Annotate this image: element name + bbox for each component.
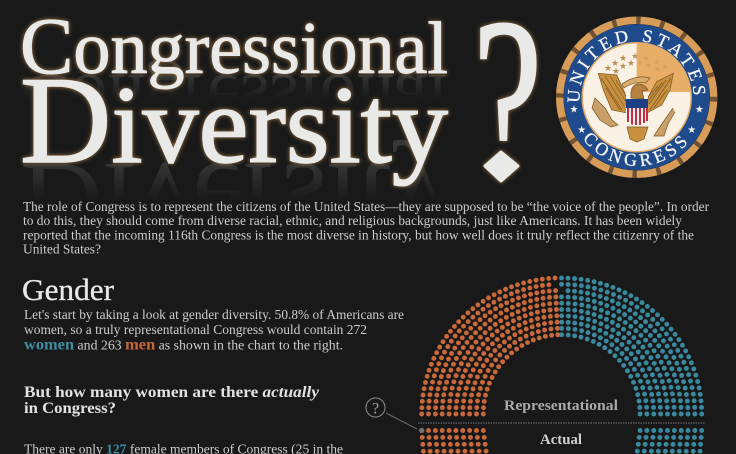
ring stars	[570, 104, 704, 136]
constellation stars: ★	[653, 65, 661, 75]
intro paragraph: reported that the incoming 116th Congress is the most diverse in history, but how well does it truly reflect the citizenry of the	[23, 228, 694, 242]
gender body text	[24, 307, 404, 354]
inner disc	[582, 43, 691, 152]
ring stars: ★	[577, 125, 586, 136]
gender body text: women, so a truly representational Congress would contain 272	[24, 322, 367, 337]
gender body text: women and 263 men as shown in the chart to the right.	[24, 336, 343, 354]
callout leader line	[386, 413, 417, 429]
intro paragraph: United States?	[23, 242, 101, 257]
intro paragraph: to do this, they should come from diverse racial, ethnic, and religious backgrounds, just like Americans. It has been widely	[23, 213, 682, 228]
title line one: Congressional	[20, 3, 448, 91]
constellation stars: ★	[612, 67, 620, 77]
constellation stars: ★	[619, 62, 627, 72]
title reflection: Congressional	[20, 58, 448, 140]
women seats	[562, 278, 702, 414]
hemicycle chart: actual	[422, 430, 702, 452]
ring stars: ★	[687, 125, 696, 136]
blue ring	[564, 24, 710, 170]
label: Actual: Actual	[540, 432, 582, 448]
intro paragraph	[23, 199, 709, 257]
constellation stars: ★	[619, 54, 627, 64]
orange quadrant	[637, 43, 690, 92]
title reflection	[20, 58, 448, 263]
constellation stars: ★	[611, 59, 619, 69]
hemicycle chart: representational	[422, 278, 702, 414]
seal: United States Congress: UNITED STATES	[567, 30, 706, 102]
title line two: Diversity	[20, 52, 448, 189]
question mark diamond dot	[485, 152, 518, 181]
constellation stars	[604, 52, 669, 77]
constellation stars: ★	[631, 52, 639, 62]
subheading: how many women	[24, 384, 319, 417]
subheading: how many women: But how many women are there actually	[24, 384, 319, 401]
constellation stars: ★	[661, 63, 669, 73]
highlighted seat	[419, 428, 424, 433]
rope ring	[560, 20, 714, 174]
constellation stars: ★	[627, 59, 635, 69]
title reflection: Diversity	[20, 139, 448, 263]
constellation stars: ★	[642, 54, 650, 64]
men seats actual	[422, 430, 486, 452]
gender body text: Let's start by taking a look at gender diversity. 50.8% of Americans are	[24, 307, 404, 322]
callout circle	[366, 398, 385, 417]
constellation stars: ★	[636, 59, 644, 69]
ring stars: ★	[695, 104, 704, 116]
constellation stars: ★	[604, 64, 612, 74]
subheading: how many women: in Congress?	[24, 400, 116, 417]
callout glyph: ?	[372, 400, 379, 418]
men seats	[422, 278, 558, 414]
constellation stars: ★	[644, 61, 652, 71]
title: Congressional Diversity?	[20, 16, 540, 191]
seal: United States Congress	[556, 16, 718, 178]
shield	[626, 99, 648, 125]
intro paragraph: The role of Congress is to represent the citizens of the United States—they are supposed to be “the voice of the people”. In order	[23, 199, 709, 214]
label: Representational: Representational	[504, 398, 618, 414]
seal lettering	[580, 41, 694, 103]
women seats actual	[637, 430, 702, 452]
seal: United States Congress: CONGRESS	[584, 133, 686, 166]
ring stars: ★	[570, 104, 579, 116]
question mark callout	[366, 398, 417, 429]
constellation stars: ★	[653, 58, 661, 68]
heading: Gender: Gender	[22, 272, 115, 307]
eagle	[592, 73, 675, 142]
